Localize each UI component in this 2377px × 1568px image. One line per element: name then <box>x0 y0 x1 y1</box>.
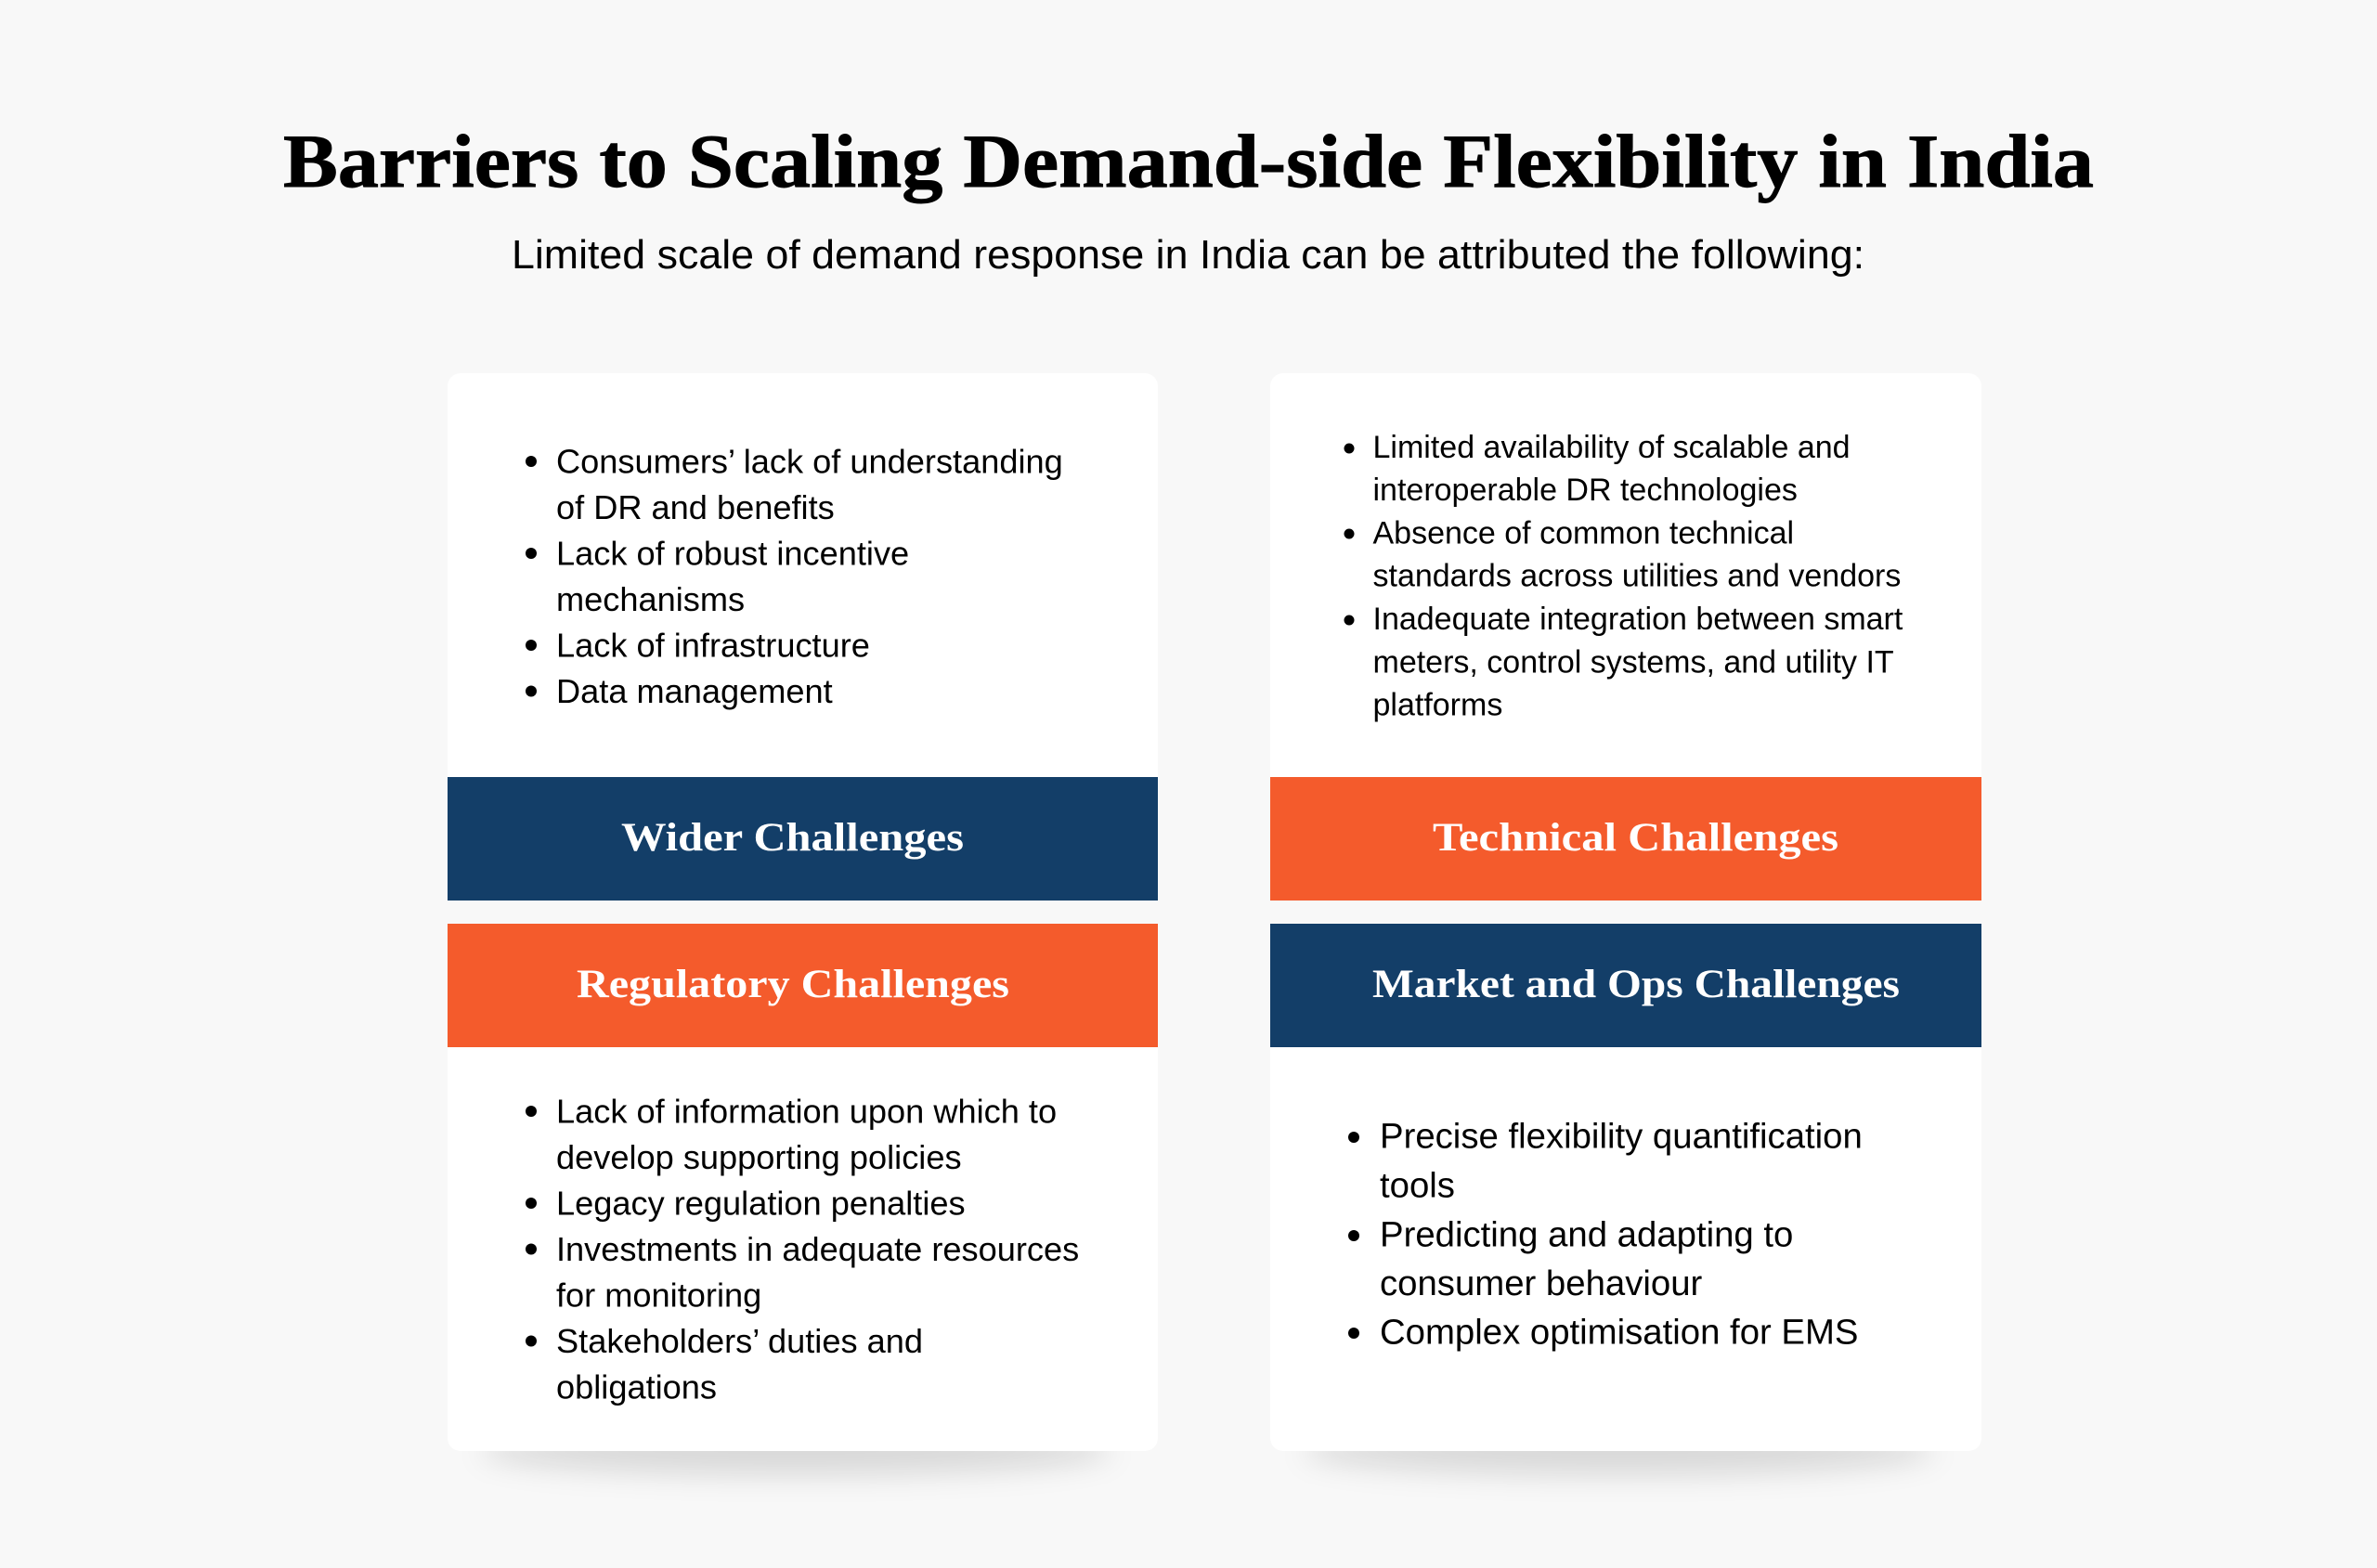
bullet list: technical challenges: platforms <box>1372 687 1502 722</box>
bullet list: wider challenges: mechanisms <box>556 580 745 618</box>
bullet list: technical challenges: Inadequate integration between smart <box>1372 602 1903 637</box>
panel: left column <box>448 373 1158 1475</box>
heading bar: market and ops challenges: Market and Ops Challenges <box>1372 963 1900 1006</box>
bullet list: regulatory challenges <box>526 1092 1079 1406</box>
bullet list: market and ops challenges <box>1348 1116 1863 1352</box>
heading bar: technical challenges <box>1270 777 1981 901</box>
bullet list: regulatory challenges: Investments in adequate resources <box>556 1230 1079 1268</box>
heading bar: wider challenges: Wider Challenges <box>621 816 964 860</box>
card shadow <box>481 1427 1112 1475</box>
heading bar: regulatory challenges <box>448 924 1158 1047</box>
bullet list: technical challenges: Absence of common technical <box>1372 516 1794 551</box>
panel: market and ops challenges body <box>1270 1047 1981 1451</box>
bullet list: regulatory challenges: Stakeholders’ duties and <box>556 1322 923 1360</box>
bullet list: market and ops challenges: Precise flexibility quantification <box>1380 1116 1863 1157</box>
bullet list: regulatory challenges: Lack of information upon which to <box>556 1092 1057 1131</box>
bullet list: wider challenges <box>526 442 1063 710</box>
heading bar: technical challenges: Technical Challenges <box>1433 816 1838 860</box>
bullet list: technical challenges: standards across utilities and vendors <box>1372 559 1901 594</box>
bullet list: market and ops challenges: tools <box>1380 1166 1455 1205</box>
subtitle: Limited scale of demand response in India can be attributed the following: <box>512 233 1864 278</box>
bullet list: market and ops challenges: Predicting and adapting to <box>1380 1214 1793 1255</box>
bullet list: regulatory challenges: for monitoring <box>556 1276 761 1315</box>
bullet list: market and ops challenges: Complex optimisation for EMS <box>1380 1313 1858 1352</box>
panel: technical challenges body <box>1270 373 1981 777</box>
bullet list: regulatory challenges: develop supporting policies <box>556 1138 962 1176</box>
card shadow <box>1304 1427 1935 1475</box>
bullet list: technical challenges: interoperable DR technologies <box>1372 473 1798 508</box>
bullet list: technical challenges: Limited availability of scalable and <box>1372 430 1851 465</box>
bullet list: wider challenges: Data management <box>556 672 833 710</box>
panel: wider challenges body <box>448 373 1158 777</box>
heading bar: market and ops challenges <box>1270 924 1981 1047</box>
bullet list: technical challenges <box>1344 430 1903 722</box>
panel: regulatory challenges body <box>448 1047 1158 1451</box>
bullet list: wider challenges: Lack of robust incentive <box>556 535 909 572</box>
bullet list: technical challenges: meters, control systems, and utility IT <box>1372 644 1894 680</box>
bullet list: wider challenges: of DR and benefits <box>556 488 835 526</box>
bullet list: market and ops challenges: consumer behaviour <box>1380 1263 1703 1303</box>
title: Barriers to Scaling Demand-side Flexibility in India <box>283 119 2094 203</box>
bullet list: regulatory challenges: Legacy regulation penalties <box>556 1185 966 1222</box>
bullet list: wider challenges: Lack of infrastructure <box>556 626 870 665</box>
heading bar: regulatory challenges: Regulatory Challenges <box>577 963 1009 1006</box>
heading bar: wider challenges <box>448 777 1158 901</box>
panel: right column <box>1270 373 1981 1475</box>
bullet list: wider challenges: Consumers’ lack of understanding <box>556 442 1063 481</box>
bullet list: regulatory challenges: obligations <box>556 1368 717 1406</box>
